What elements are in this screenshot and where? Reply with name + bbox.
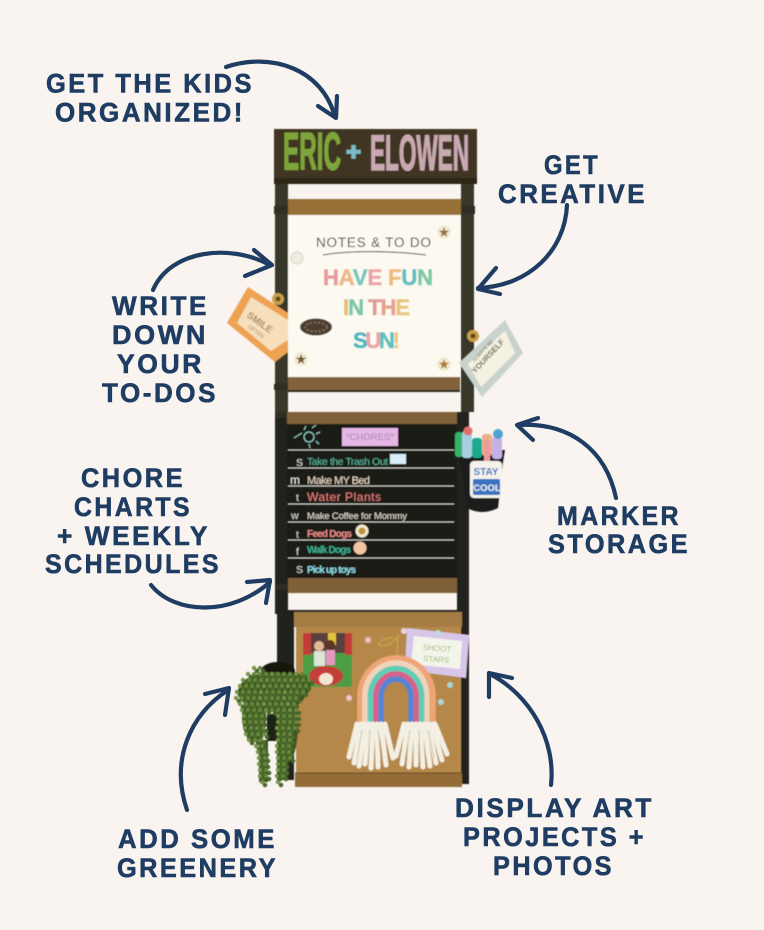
note card: [405, 628, 469, 678]
right tassel: [396, 724, 447, 767]
label: add some greenery: GREENERY: [117, 853, 278, 883]
label: chore charts and weekly schedules: [45, 463, 221, 579]
chore list: [290, 454, 407, 576]
name sign: +: [346, 139, 361, 166]
chore list: S: [296, 457, 303, 469]
note card: SHOOT: [423, 643, 452, 654]
label: chore charts and weekly schedules: CHARTS: [74, 492, 192, 522]
clip card: smile often: OFTEN: [246, 324, 265, 340]
magnets: ★: [295, 352, 307, 368]
note card: STARS: [423, 654, 449, 665]
label: get creative: CREATIVE: [498, 179, 647, 209]
label: write down your to-dos: [102, 291, 218, 408]
magnets: [291, 225, 451, 373]
stay cool sticker: STAY: [473, 467, 499, 478]
chore list: w: [290, 510, 299, 522]
arrow: to plant: [181, 688, 229, 810]
label: display art projects and photos: PHOTOS: [493, 851, 614, 881]
chore list: Feed Dogs: [307, 529, 352, 540]
arrow: to name sign: [226, 62, 337, 118]
rainbow wall hanging: [349, 636, 447, 768]
label: get the kids organized: [46, 68, 254, 128]
arrow: to whiteboard from left: [153, 250, 272, 290]
chore list: Make Coffee for Mommy: [307, 511, 407, 522]
label: marker storage: [548, 501, 690, 559]
label: write down your to-dos: YOUR: [117, 349, 204, 379]
left tassel: [349, 724, 393, 768]
whiteboard message: [323, 265, 433, 353]
arrow: to whiteboard from right: [478, 205, 567, 294]
chore list: Water Plants: [307, 490, 381, 504]
panel: chore chalkboard: *CHORES*: [346, 432, 394, 443]
whiteboard message: SUN!: [353, 328, 400, 353]
chalk sun: [294, 425, 320, 448]
magnets: ★: [438, 225, 450, 241]
chore list: Take the Trash Out: [307, 456, 388, 468]
arrow: to marker cup: [517, 418, 616, 498]
label: get creative: GET: [544, 150, 600, 180]
whiteboard message: IN THE: [343, 295, 410, 320]
whiteboard heading: NOTES & TO DO: [316, 235, 431, 250]
name sign: ERIC: [283, 122, 341, 182]
chores label: [342, 428, 398, 446]
stay cool sticker: COOL: [473, 483, 501, 494]
label: write down your to-dos: TO-DOS: [102, 378, 218, 408]
chore list: t: [296, 529, 299, 541]
whiteboard message: HAVE FUN: [323, 265, 433, 290]
panel: cork board: [294, 612, 469, 787]
label: get the kids organized: GET THE KIDS: [46, 68, 254, 98]
label: write down your to-dos: WRITE: [112, 291, 209, 321]
label: get the kids organized: ORGANIZED!: [55, 98, 245, 128]
label: get creative: [498, 150, 647, 209]
organizer board: ELOWEN: [370, 125, 469, 181]
clip card: smile often: [227, 287, 288, 362]
hanging plant: [236, 662, 313, 785]
label: chore charts and weekly schedules: SCHEDULES: [45, 549, 221, 579]
chore list: Walk Dogs: [307, 545, 351, 556]
chore list: Pick up toys: [307, 565, 356, 576]
arrow: to cork board: [489, 673, 552, 785]
clip card: always be yourself: YOURSELF: [470, 337, 506, 375]
photo: [303, 633, 352, 687]
label: marker storage: MARKER: [557, 501, 681, 531]
chore list: f: [296, 546, 299, 558]
stay cool sticker: [470, 461, 502, 498]
marker cup: [455, 426, 505, 512]
label: display art projects and photos: PROJECTS +: [463, 822, 646, 852]
frame legs: [274, 184, 475, 784]
chore list: m: [290, 473, 300, 487]
chore list: Make MY Bed: [307, 475, 370, 487]
label: add some greenery: ADD SOME: [118, 824, 277, 854]
label: add some greenery: [117, 824, 278, 883]
clip card: always be yourself: [459, 320, 523, 397]
label: marker storage: STORAGE: [548, 529, 690, 559]
label: chore charts and weekly schedules: + WEEKLY: [57, 521, 210, 551]
magnets: ★: [438, 357, 450, 373]
chore list: S: [296, 564, 303, 576]
name sign: [274, 122, 477, 184]
label: chore charts and weekly schedules: CHORE: [81, 463, 185, 493]
push pins: [346, 628, 453, 705]
chore list: t: [296, 492, 299, 504]
label: display art projects and photos: [455, 793, 654, 881]
panel: chore chalkboard: [287, 412, 457, 593]
label: write down your to-dos: DOWN: [112, 320, 208, 350]
arrow: to chalkboard: [151, 580, 270, 608]
clip card: always be yourself: ALWAYS BE: [472, 339, 495, 364]
clip card: smile often: SMILE: [244, 310, 274, 336]
label: display art projects and photos: DISPLAY ART: [455, 793, 654, 823]
organizer board: [227, 122, 523, 787]
panel: whiteboard: [288, 199, 461, 392]
